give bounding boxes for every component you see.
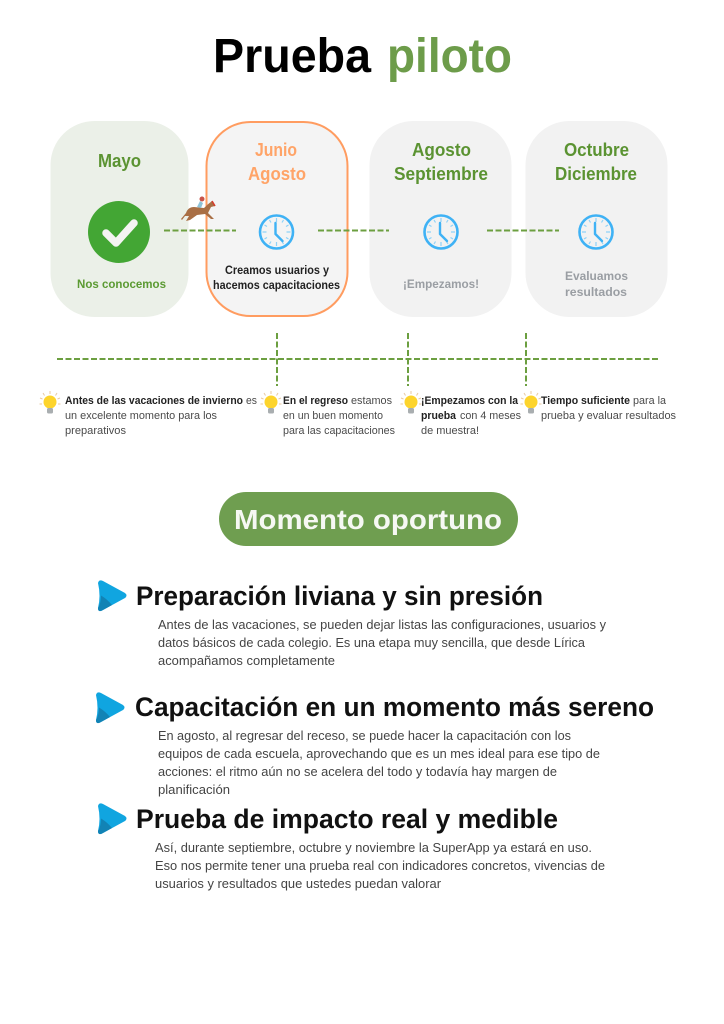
- section: prueba de impacto: Así, durante septiembre, octubre y noviembre la SuperApp ya estará en uso.: [155, 841, 592, 855]
- icon: blue arrow: [98, 580, 126, 611]
- section: preparación: datos básicos de cada colegio. Es una etapa muy sencilla, que desde Lírica: [158, 636, 585, 650]
- section: preparación: acompañamos completamente: [158, 654, 335, 668]
- section: preparación: Antes de las vacaciones, se pueden dejar listas las configuraciones, usuarios y: [158, 618, 607, 632]
- section: prueba de impacto: usuarios y resultados que ustedes puedan valorar: [155, 877, 441, 891]
- icon: blue arrow: [96, 692, 124, 723]
- tip: regreso: [260, 391, 395, 437]
- title: piloto: [387, 30, 512, 83]
- icon: racing horse: [181, 196, 215, 221]
- tip: empezamos: [400, 391, 521, 437]
- arrow: dashed connector 3: [487, 230, 559, 232]
- tip: vacaciones: un excelente momento para los: [65, 410, 217, 422]
- section: capacitación: [96, 692, 654, 797]
- section: preparación: [98, 580, 607, 668]
- panel: Octubre Diciembre: resultados: [565, 285, 627, 299]
- tip: regreso: estamos: [351, 395, 392, 407]
- tip: empezamos: con 4 meses: [460, 410, 521, 422]
- panel: Junio Agosto: Junio: [255, 140, 297, 160]
- section: prueba de impacto: Eso nos permite tener una prueba real con indicadores concretos, vivencias de: [155, 859, 605, 873]
- heading pill: Momento oportuno: [234, 504, 502, 535]
- section: prueba de impacto: Prueba de impacto real y medible: [136, 804, 558, 834]
- tip: vacaciones: es: [246, 395, 257, 407]
- icon: green check: [88, 201, 150, 263]
- section: capacitación: planificación: [158, 783, 230, 797]
- section: preparación: Preparación liviana y sin presión: [136, 581, 543, 611]
- section: capacitación: Capacitación en un momento más sereno: [135, 692, 654, 722]
- tip: regreso: para las capacitaciones: [283, 425, 395, 437]
- panel: Agosto Septiembre: ¡Empezamos!: [403, 277, 479, 291]
- panel: Mayo: Mayo: [98, 151, 141, 171]
- panel: Octubre Diciembre: Octubre: [564, 140, 629, 160]
- icon: clock: [580, 216, 612, 248]
- tip: tiempo: para la: [633, 395, 667, 407]
- panel: Octubre Diciembre: [526, 121, 668, 317]
- section: prueba de impacto: [98, 803, 605, 891]
- tip: vacaciones: Antes de las vacaciones de invierno: [65, 395, 243, 407]
- tip: empezamos: prueba: [421, 410, 457, 422]
- tip: tiempo: Tiempo suficiente: [541, 395, 630, 407]
- panel: Agosto Septiembre: Septiembre: [394, 164, 488, 184]
- panel: Agosto Septiembre: Agosto: [412, 140, 471, 160]
- panel: Mayo: [50, 121, 188, 317]
- icon: clock: [424, 216, 458, 248]
- heading pill: [219, 492, 518, 546]
- timeline: [57, 333, 658, 386]
- title: [213, 30, 512, 83]
- title: Prueba: [213, 30, 371, 83]
- icon: clock: [260, 216, 293, 248]
- tip: tiempo: prueba y evaluar resultados: [541, 410, 676, 422]
- icon: light bulb: [260, 391, 282, 414]
- section: capacitación: En agosto, al regresar del receso, se puede hacer la capacitación con los: [158, 729, 571, 743]
- icon: light bulb: [520, 391, 542, 414]
- panel: Junio Agosto: [206, 122, 348, 316]
- icon: light bulb: [40, 391, 60, 414]
- tip: vacaciones: preparativos: [65, 425, 126, 437]
- section: capacitación: acciones: el ritmo aún no se acelera del todo y todavía hay margen de: [158, 765, 557, 779]
- tip: vacaciones: [40, 391, 257, 437]
- panel: Mayo: Nos conocemos: [77, 277, 166, 291]
- tip: empezamos: de muestra!: [421, 425, 479, 437]
- icon: light bulb: [400, 391, 422, 414]
- arrow: dashed connector 1: [164, 230, 236, 232]
- panel: Octubre Diciembre: Evaluamos: [565, 269, 628, 283]
- tip: regreso: En el regreso: [283, 395, 348, 407]
- tip: empezamos: ¡Empezamos con la: [421, 395, 519, 407]
- tip: regreso: en un buen momento: [283, 410, 383, 422]
- section: capacitación: equipos de cada escuela, aprovechando que es un mes ideal para ese tipo de: [158, 747, 600, 761]
- panel: Octubre Diciembre: Diciembre: [555, 164, 637, 184]
- arrow: dashed connector 2: [318, 230, 389, 232]
- panel: Agosto Septiembre: [370, 121, 512, 317]
- panel: Junio Agosto: Agosto: [248, 164, 306, 184]
- tip: tiempo: [520, 391, 676, 422]
- panel: Junio Agosto: hacemos capacitaciones: [213, 278, 340, 292]
- panel: Junio Agosto: Creamos usuarios y: [225, 263, 329, 277]
- icon: blue arrow: [98, 803, 126, 834]
